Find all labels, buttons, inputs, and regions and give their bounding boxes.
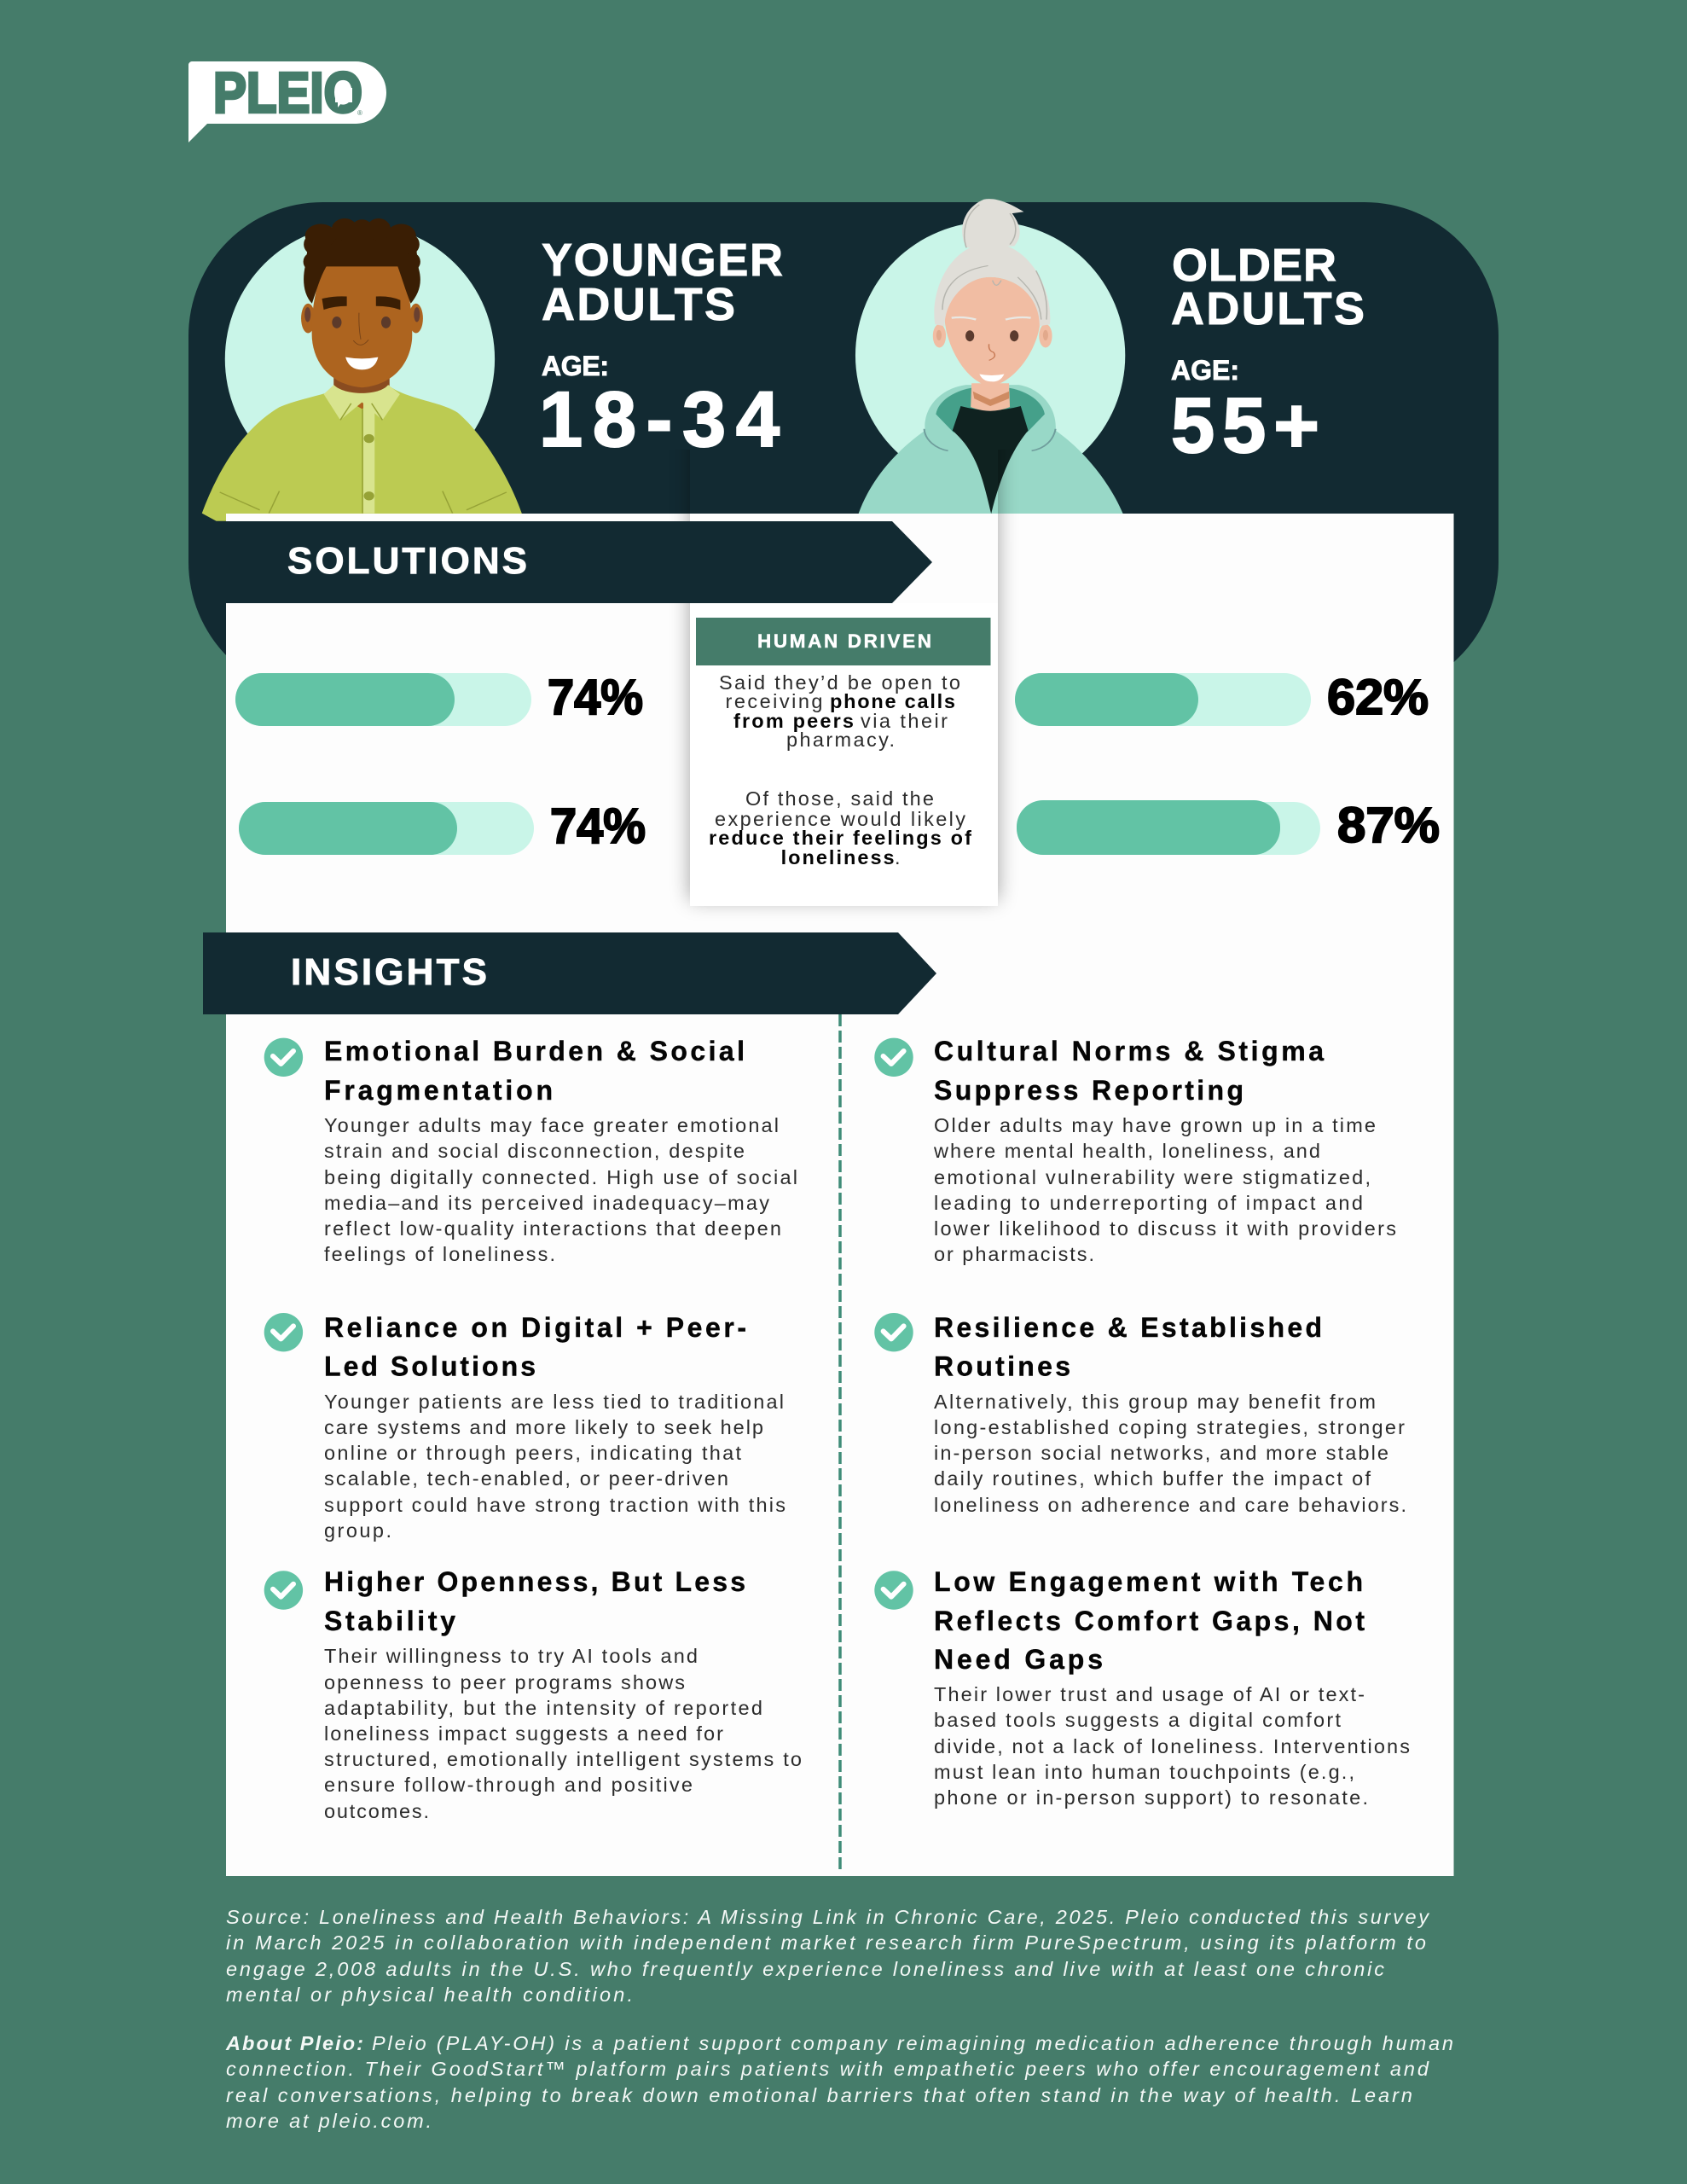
panel: human driven card — [690, 603, 998, 906]
insight: higher openness: outcomes. — [324, 1800, 429, 1822]
bar: older 87% reduce loneliness: 87% — [1337, 798, 1440, 853]
insight: emotional burden: feelings of loneliness. — [324, 1243, 555, 1265]
heading: older adults — [1171, 240, 1365, 469]
banner: insights: INSIGHTS — [291, 951, 487, 993]
insight: higher openness: openness to peer programs shows — [324, 1671, 685, 1693]
card text: reduce loneliness: reduce their feelings of — [709, 827, 971, 849]
card text: phone calls: Said they’d be open to — [719, 671, 960, 694]
insight: emotional burden — [264, 1036, 797, 1265]
bar: older 62% open to calls — [1015, 670, 1429, 726]
insight: low engagement: Low Engagement with Tech — [934, 1566, 1363, 1597]
source note: Source: Loneliness and Health Behaviors: A Missing Link in Chronic Care, 2025. Pleio conducted this survey — [226, 1906, 1429, 1928]
bar: older 87% reduce loneliness — [1017, 798, 1440, 855]
icon: check — [264, 1038, 303, 1077]
card text: phone calls: phone calls — [830, 690, 955, 712]
about pleio note: real conversations, helping to break down emotional barriers that often stand in the way of health. Learn — [226, 2084, 1412, 2106]
insight: higher openness: ensure follow-through and positive — [324, 1774, 693, 1796]
card header: HUMAN DRIVEN — [757, 630, 931, 652]
insight: low engagement: phone or in-person support) to resonate. — [934, 1786, 1368, 1809]
bar: younger 74% reduce loneliness — [239, 799, 646, 855]
insight: cultural norms: Suppress Reporting — [934, 1075, 1244, 1106]
bar: younger 74% reduce loneliness: 74% — [550, 799, 646, 854]
banner: insights — [203, 932, 936, 1014]
logo: Pleio speech bubble: ® — [357, 109, 362, 117]
insight: resilience: Routines — [934, 1351, 1070, 1382]
about pleio note: Pleio (PLAY-OH) is a patient support company reimagining medication adherence through human — [372, 2032, 1453, 2054]
insight: reliance on digital: support could have strong traction with this — [324, 1494, 786, 1516]
insight: resilience: Alternatively, this group may benefit from — [934, 1391, 1376, 1413]
insight: low engagement: based tools suggests a digital comfort — [934, 1709, 1341, 1731]
center dashed divider — [838, 1014, 842, 1870]
insight: emotional burden: being digitally connected. High use of social — [324, 1166, 797, 1188]
card text: reduce loneliness: loneliness — [781, 846, 895, 868]
insight: reliance on digital: online or through peers, indicating that — [324, 1442, 741, 1464]
illustration: older adult — [855, 199, 1125, 514]
insight: higher openness — [264, 1566, 802, 1822]
insight: cultural norms: Cultural Norms & Stigma — [934, 1036, 1324, 1066]
hair — [304, 218, 420, 304]
source note — [226, 1906, 1429, 2006]
insight: low engagement — [874, 1566, 1410, 1809]
heading: older adults: ADULTS — [1171, 283, 1365, 334]
heading: younger adults: ADULTS — [542, 279, 735, 330]
icon: check — [264, 1313, 303, 1351]
insight: low engagement: Reflects Comfort Gaps, Not — [934, 1606, 1365, 1636]
panel: white content area — [226, 514, 1453, 1876]
card header — [696, 618, 991, 665]
insight: reliance on digital — [264, 1312, 786, 1542]
insight: low engagement: Need Gaps — [934, 1644, 1103, 1675]
bar: younger 74% open to calls: 74% — [548, 670, 643, 725]
insight: resilience — [874, 1312, 1406, 1516]
banner: solutions: SOLUTIONS — [287, 540, 527, 582]
card text: reduce loneliness: experience would likely — [715, 808, 965, 830]
illustration: younger adult — [202, 218, 522, 521]
insight: emotional burden: strain and social disconnection, despite — [324, 1140, 745, 1162]
insight: higher openness: adaptability, but the intensity of reported — [324, 1697, 762, 1719]
logo: Pleio speech bubble: PLEIO — [213, 61, 362, 125]
insight: cultural norms — [874, 1036, 1396, 1265]
insight: emotional burden: reflect low-quality interactions that deepen — [324, 1217, 781, 1240]
center card shadow — [690, 418, 998, 900]
insight: higher openness: structured, emotionally intelligent systems to — [324, 1748, 802, 1770]
insight: emotional burden: Younger adults may face greater emotional — [324, 1114, 779, 1136]
source note: mental or physical health condition. — [226, 1984, 633, 2006]
insight: reliance on digital: Led Solutions — [324, 1351, 536, 1382]
source note: in March 2025 in collaboration with independent market research firm PureSpectrum, using its platform to — [226, 1931, 1426, 1954]
card text: phone calls: receiving — [725, 690, 822, 712]
insight: cultural norms: emotional vulnerability were stigmatized, — [934, 1166, 1371, 1188]
insight: low engagement: Their lower trust and usage of AI or text- — [934, 1683, 1365, 1705]
about pleio note: About Pleio: — [225, 2032, 363, 2054]
insight: cultural norms: Older adults may have grown up in a time — [934, 1114, 1376, 1136]
insight: low engagement: divide, not a lack of loneliness. Interventions — [934, 1735, 1410, 1757]
card text: reduce loneliness: Of those, said the — [745, 787, 934, 810]
insight: emotional burden: media–and its perceived inadequacy–may — [324, 1192, 769, 1214]
heading: older adults: 55+ — [1171, 382, 1319, 469]
card text: phone calls — [719, 671, 960, 751]
card text: phone calls: pharmacy. — [786, 729, 895, 751]
insight: resilience: loneliness on adherence and care behaviors. — [934, 1494, 1406, 1516]
insight: cultural norms: leading to underreporting of impact and — [934, 1192, 1363, 1214]
heading: older adults: OLDER — [1172, 240, 1336, 291]
icon: check — [874, 1571, 913, 1610]
insight: cultural norms: where mental health, loneliness, and — [933, 1140, 1320, 1162]
insight: reliance on digital: Reliance on Digital + Peer- — [324, 1312, 746, 1343]
icon: check — [874, 1313, 913, 1351]
insight: emotional burden: Fragmentation — [324, 1075, 553, 1106]
heading: older adults: AGE: — [1171, 355, 1239, 386]
card text: reduce loneliness: . — [895, 846, 901, 868]
insight: reliance on digital: group. — [324, 1519, 391, 1542]
icon: check — [264, 1571, 303, 1610]
heading: younger adults — [539, 235, 783, 463]
insight: cultural norms: or pharmacists. — [934, 1243, 1094, 1265]
insight: resilience: long-established coping strategies, stronger — [934, 1416, 1405, 1438]
heading: younger adults: 18-34 — [539, 376, 780, 463]
card text: phone calls: from peers — [733, 710, 854, 732]
insight: reliance on digital: scalable, tech-enabled, or peer-driven — [324, 1467, 728, 1490]
bar: older 62% open to calls: 62% — [1327, 670, 1429, 725]
insight: cultural norms: lower likelihood to discuss it with providers — [934, 1217, 1396, 1240]
card text: phone calls: via their — [861, 710, 948, 732]
insight: higher openness: Stability — [324, 1606, 455, 1636]
insight: higher openness: Higher Openness, But Less — [324, 1566, 745, 1597]
heading: younger adults: YOUNGER — [542, 235, 783, 286]
insight: reliance on digital: care systems and more likely to seek help — [324, 1416, 763, 1438]
insight: emotional burden: Emotional Burden & Social — [324, 1036, 745, 1066]
insight: low engagement: must lean into human touchpoints (e.g., — [934, 1761, 1354, 1783]
about pleio note — [225, 2032, 1453, 2132]
about pleio note: more at pleio.com. — [226, 2110, 432, 2132]
heading: younger adults: AGE: — [542, 351, 609, 381]
about pleio note: connection. Their GoodStart™ platform pairs patients with empathetic peers who offer encouragement and — [226, 2058, 1429, 2080]
insight: resilience: Resilience & Established — [934, 1312, 1322, 1343]
banner: solutions — [196, 521, 932, 603]
insight: higher openness: Their willingness to try AI tools and — [324, 1645, 698, 1667]
insight: resilience: in-person social networks, and more stable — [934, 1442, 1388, 1464]
icon: check — [874, 1038, 913, 1077]
bar: younger 74% open to calls — [235, 670, 643, 726]
insight: higher openness: loneliness impact suggests a need for — [324, 1722, 723, 1745]
logo: Pleio speech bubble — [188, 61, 386, 142]
panel: dark header background — [188, 202, 1499, 696]
insight: reliance on digital: Younger patients are less tied to traditional — [324, 1391, 784, 1413]
insight: resilience: daily routines, which buffer the impact of — [934, 1467, 1371, 1490]
source note: engage 2,008 adults in the U.S. who frequently experience loneliness and live with at least one chronic — [226, 1958, 1384, 1980]
card text: reduce loneliness — [709, 787, 971, 868]
